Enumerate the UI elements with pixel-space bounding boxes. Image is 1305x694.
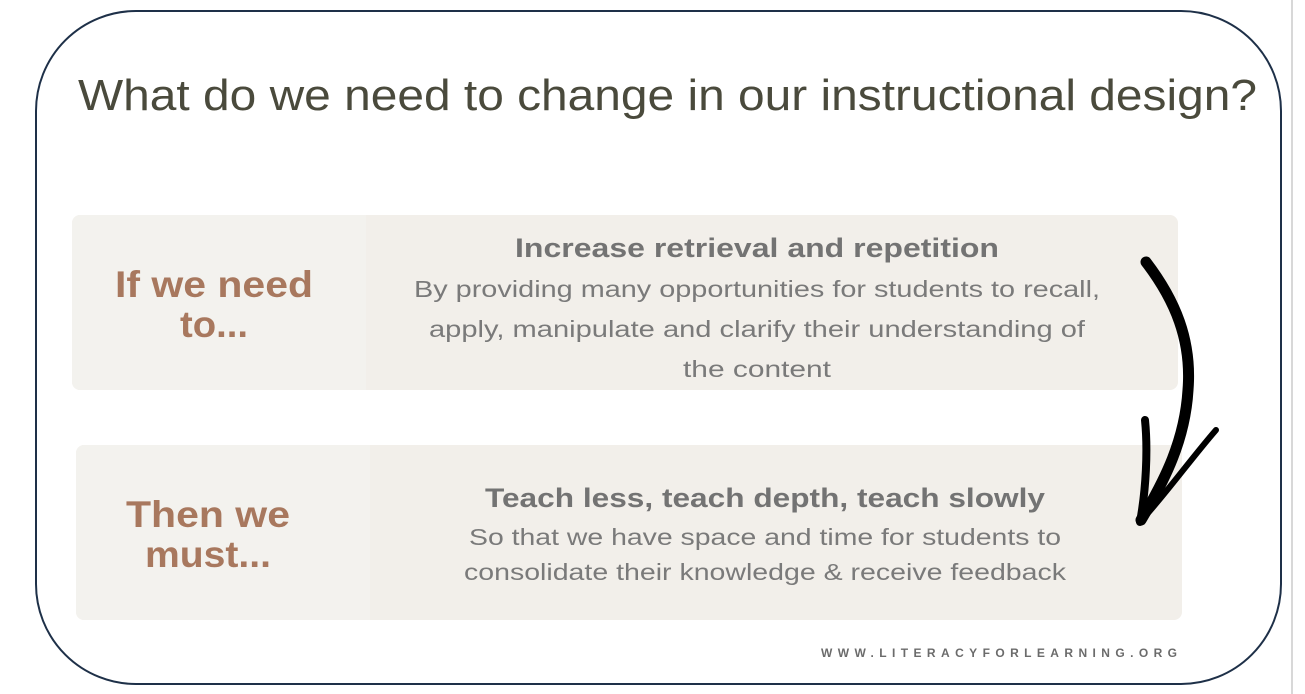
text block: teach less description: consolidate their knowledge & receive feedback [464,559,1067,585]
footer url: WWW.LITERACYFORLEARNING.ORG [821,646,1177,660]
text block: retrieval description: apply, manipulate and clarify their understanding of [429,316,1086,342]
text block: retrieval description: By providing many opportunities for students to recall, [414,276,1100,302]
text block: retrieval description: the content [683,356,832,382]
label: then we must: must... [145,534,271,575]
label: if we need to: If we need [115,264,313,305]
text block: teach less description: So that we have space and time for students to [469,524,1061,550]
label: then we must: Then we [126,494,290,535]
label: then we must [126,494,290,575]
title: What do we need to change in our instructional design? [78,71,1257,120]
label: if we need to: to... [180,304,248,345]
arrow: curved down [1140,262,1216,522]
text block: teach less description [464,524,1067,585]
heading: increase retrieval: Increase retrieval and repetition [515,233,999,263]
panel: if we need to [72,215,1178,390]
panel: then we must [76,445,1182,620]
heading: teach less: Teach less, teach depth, teach slowly [485,483,1045,513]
label: if we need to [115,264,313,345]
text block: retrieval description [414,276,1100,382]
